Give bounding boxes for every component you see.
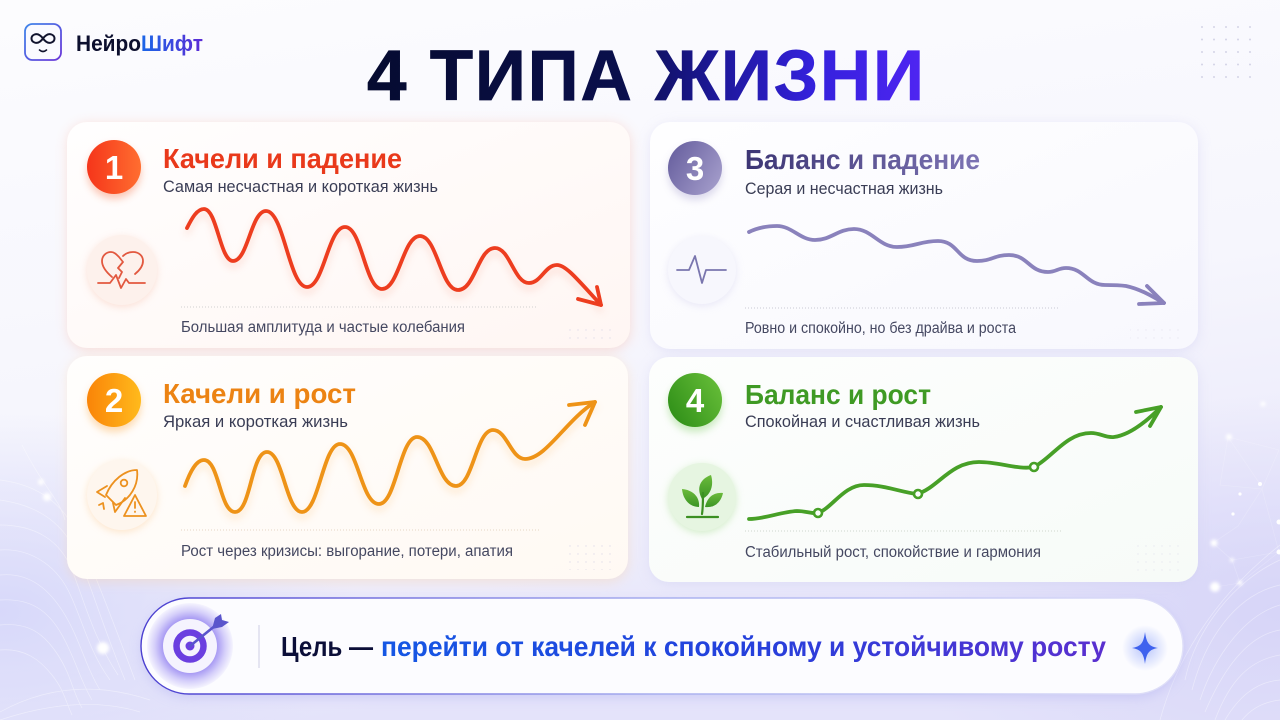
note 2: Рост через кризисы: выгорание, потери, апатия — [181, 543, 513, 560]
logo — [25, 24, 203, 60]
number badge 1: 1 — [105, 149, 123, 186]
subtitle 1: Самая несчастная и короткая жизнь — [163, 178, 438, 196]
number badge 2 — [87, 373, 141, 432]
decorative dot grid — [1193, 23, 1259, 79]
panel: 1 swings and fall — [67, 122, 630, 350]
icon: target with arrow — [147, 603, 233, 689]
subtitle 2: Яркая и короткая жизнь — [163, 413, 348, 431]
icon: broken heart — [87, 235, 157, 307]
milestones — [814, 463, 1038, 517]
subtitle 4: Спокойная и счастливая жизнь — [745, 413, 980, 431]
panel: 2 swings and growth — [67, 356, 628, 582]
icon: pulse — [668, 236, 736, 306]
note 1: Большая амплитуда и частые колебания — [181, 319, 465, 336]
number badge 2: 2 — [105, 382, 123, 419]
note 3: Ровно и спокойно, но без драйва и роста — [745, 320, 1016, 337]
title: 4 ТИПА ЖИЗНИ — [367, 37, 924, 116]
line chart: big swings rising — [185, 402, 595, 517]
line chart: gentle waves falling — [749, 226, 1164, 304]
goal text highlighted: перейти от качелей к спокойному и устойчивому росту — [381, 631, 1106, 662]
number badge 4: 4 — [686, 382, 705, 419]
logo text: НейроШифт — [76, 31, 203, 56]
subtitle 3: Серая и несчастная жизнь — [745, 180, 943, 198]
number badge 1 — [87, 140, 141, 199]
panel: 3 balance and fall — [650, 122, 1198, 351]
icon: sprout — [668, 463, 736, 533]
icon: sparkle — [1122, 625, 1168, 671]
goal banner — [141, 598, 1183, 697]
logo icon — [25, 24, 61, 60]
number badge 4 — [668, 373, 722, 432]
number badge 3 — [668, 141, 722, 200]
number badge 3: 3 — [686, 150, 704, 187]
heading 1: Качели и падение — [163, 143, 402, 174]
goal text: Цель — — [281, 631, 373, 662]
heading 2: Качели и рост — [163, 378, 356, 409]
line chart: steady growth — [749, 407, 1161, 519]
icon: rocket with warning — [87, 460, 157, 532]
heading 3: Баланс и падение — [745, 144, 980, 175]
panel: 4 balance and growth — [649, 357, 1198, 584]
heading 4: Баланс и рост — [745, 379, 931, 410]
note 4: Стабильный рост, спокойствие и гармония — [745, 544, 1041, 561]
line chart: big swings falling — [187, 209, 601, 310]
